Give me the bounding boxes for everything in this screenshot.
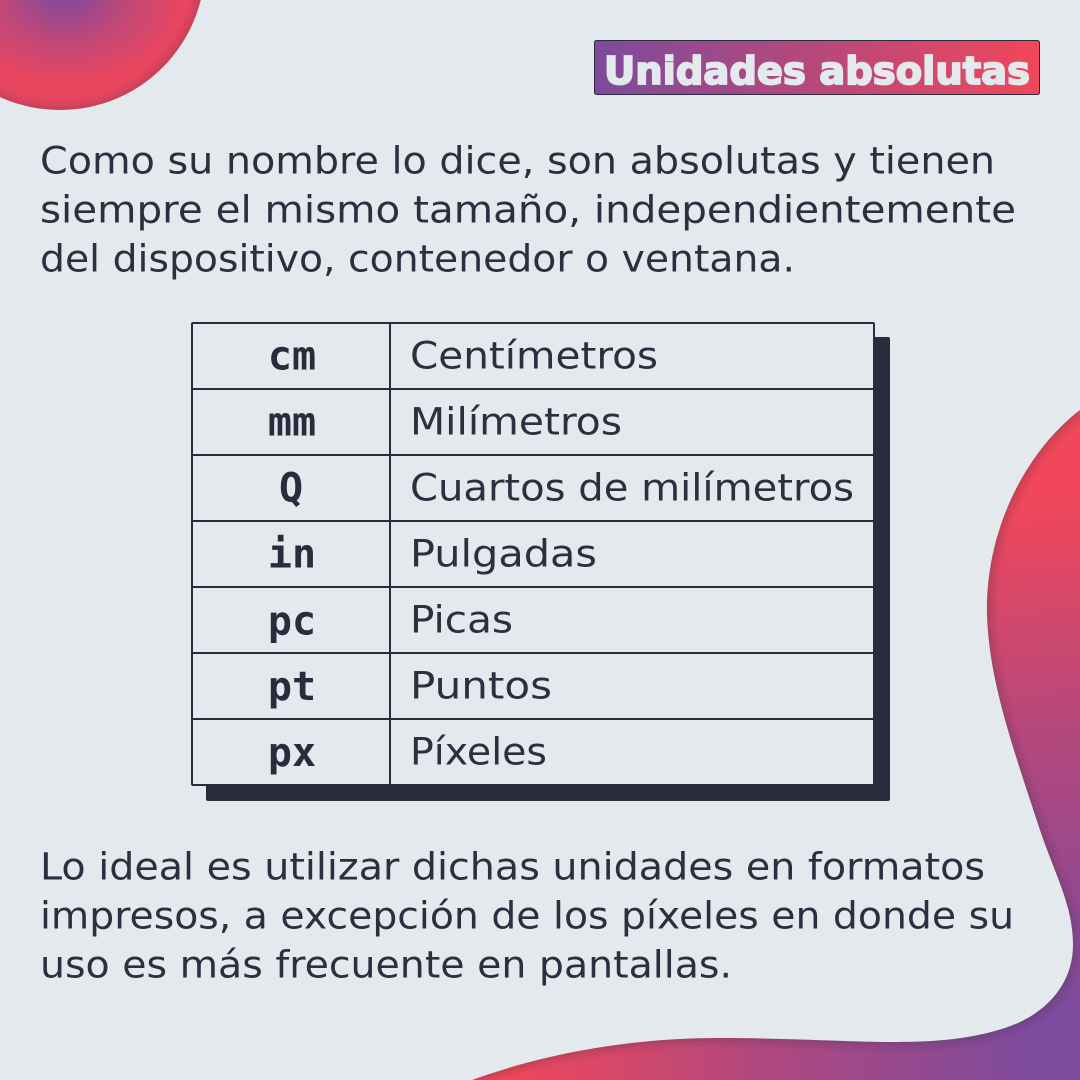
row: mm: mm xyxy=(268,400,316,446)
row: cm xyxy=(268,333,658,380)
row: Q: Q xyxy=(279,466,303,512)
row: Q: Cuartos de milímetros xyxy=(410,465,854,509)
row: px: px xyxy=(268,730,316,776)
intro paragraph xyxy=(40,138,1016,280)
row: px: Píxeles xyxy=(410,729,547,773)
intro paragraph: Como su nombre lo dice, son absolutas y tienen xyxy=(40,138,995,182)
table body and grid xyxy=(192,323,874,785)
row: px xyxy=(268,729,547,776)
table drop shadow xyxy=(206,337,890,801)
row: in: Pulgadas xyxy=(410,531,597,575)
row: pc: pc xyxy=(268,598,316,644)
closing paragraph xyxy=(40,844,1014,986)
row: pc: Picas xyxy=(410,597,513,641)
row: cm: Centímetros xyxy=(410,333,658,377)
row: pt xyxy=(268,663,552,710)
intro paragraph: del dispositivo, contenedor o ventana. xyxy=(40,236,795,280)
row: in: in xyxy=(268,532,316,578)
closing paragraph: impresos, a excepción de los píxeles en donde su xyxy=(40,893,1014,937)
row: Q xyxy=(279,465,854,512)
row: in xyxy=(268,531,597,578)
closing paragraph: uso es más frecuente en pantallas. xyxy=(40,942,732,986)
row: cm: cm xyxy=(268,334,316,380)
row: pt: pt xyxy=(268,664,316,710)
units table xyxy=(192,323,890,801)
row: pc xyxy=(268,597,513,644)
row: mm xyxy=(268,399,622,446)
top-left gradient circle xyxy=(0,0,205,110)
title badge: Unidades absolutas xyxy=(604,49,1030,94)
closing paragraph: Lo ideal es utilizar dichas unidades en formatos xyxy=(40,844,985,888)
row: mm: Milímetros xyxy=(410,399,622,443)
intro paragraph: siempre el mismo tamaño, independientemente xyxy=(40,187,1016,231)
row: pt: Puntos xyxy=(410,663,552,707)
bottom-right gradient blob xyxy=(472,410,1080,1080)
